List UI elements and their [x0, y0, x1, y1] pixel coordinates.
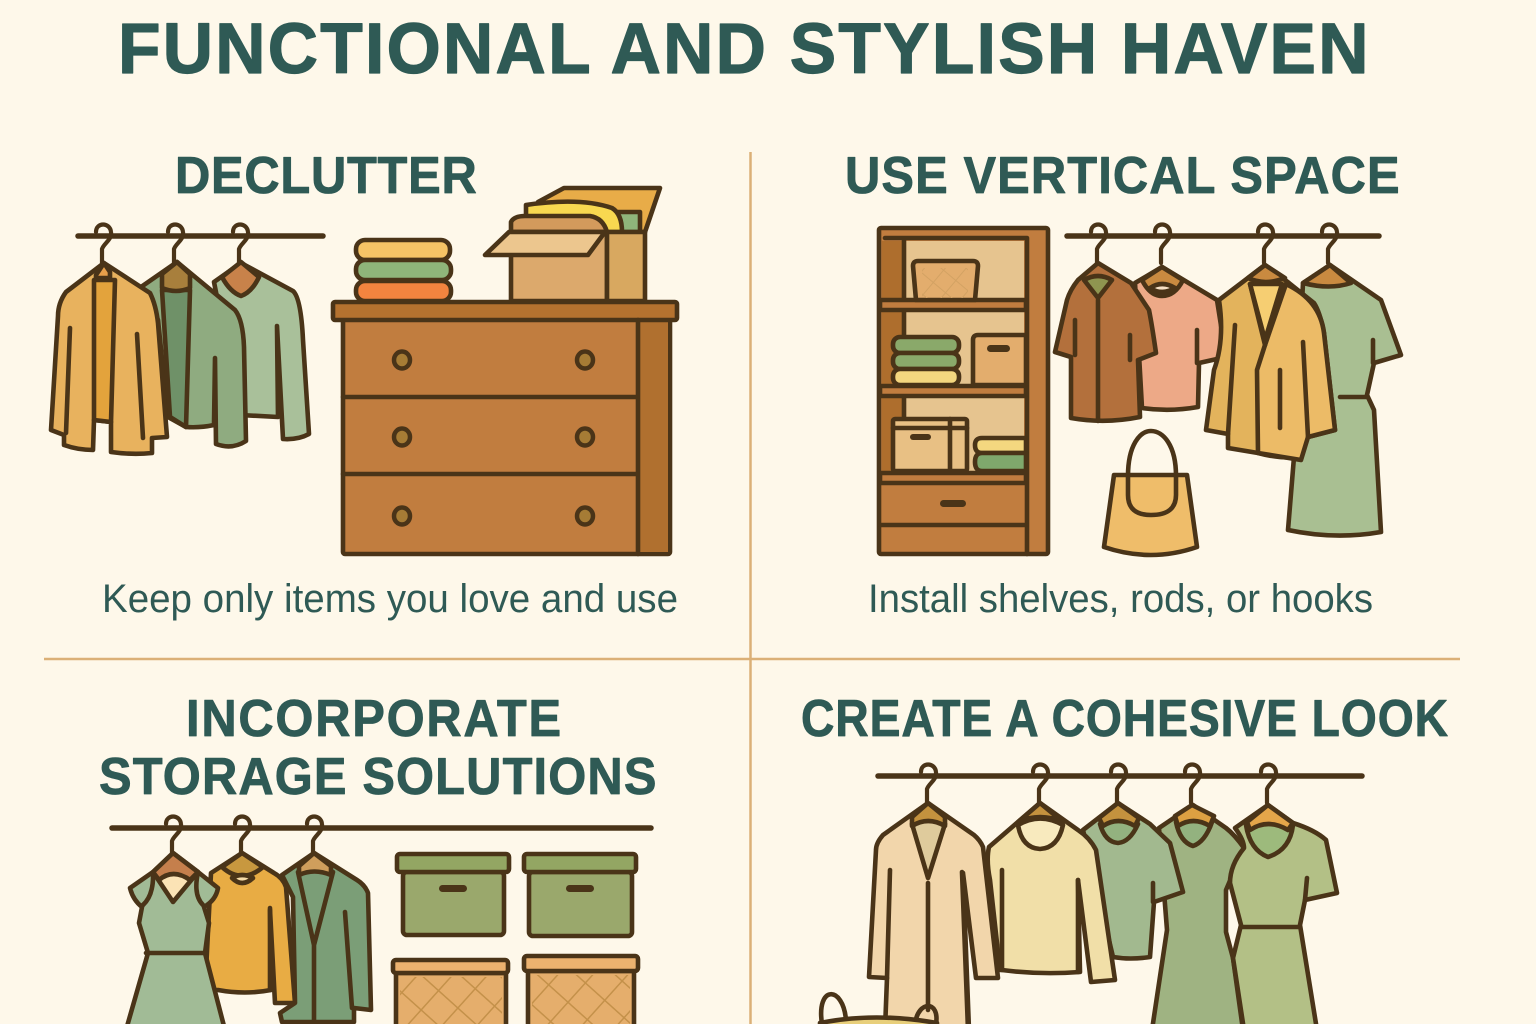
title: FUNCTIONAL AND STYLISH HAVEN: [118, 8, 1368, 88]
icon: lidded green storage boxes: [397, 854, 636, 936]
icon: woven baskets: [393, 956, 638, 1024]
panel: declutter: [51, 146, 678, 621]
icon: handbag: [1104, 431, 1197, 555]
heading: declutter: DECLUTTER: [175, 146, 477, 204]
caption: use vertical space: Install shelves, rods, or hooks: [868, 577, 1373, 621]
heading: incorporate storage solutions: STORAGE SOLUTIONS: [99, 747, 656, 805]
heading: create a cohesive look: CREATE A COHESIVE LOOK: [801, 690, 1448, 748]
heading: use vertical space: USE VERTICAL SPACE: [845, 146, 1400, 204]
panel: incorporate storage solutions: [99, 689, 656, 1024]
icon: wooden dresser: [333, 302, 677, 554]
icon: clothes rack with three garments: [51, 224, 323, 454]
panel: use vertical space: [845, 146, 1401, 621]
heading: incorporate storage solutions: INCORPORATE: [186, 689, 561, 747]
icon: rail with five coordinated garments: [869, 764, 1362, 1024]
icon: rail with dress, sweater and jacket: [112, 816, 651, 1024]
icon: wicker basket: [820, 994, 937, 1024]
icon: stack of folded clothes: [356, 240, 451, 301]
heading: incorporate storage solutions: [99, 689, 656, 805]
icon: tall bookcase with storage: [879, 228, 1048, 554]
icon: clothes rail with four garments: [1055, 224, 1401, 536]
icon: open cardboard box: [485, 188, 660, 301]
panel: create a cohesive look: [801, 690, 1448, 1024]
caption: declutter: Keep only items you love and use: [102, 577, 678, 621]
